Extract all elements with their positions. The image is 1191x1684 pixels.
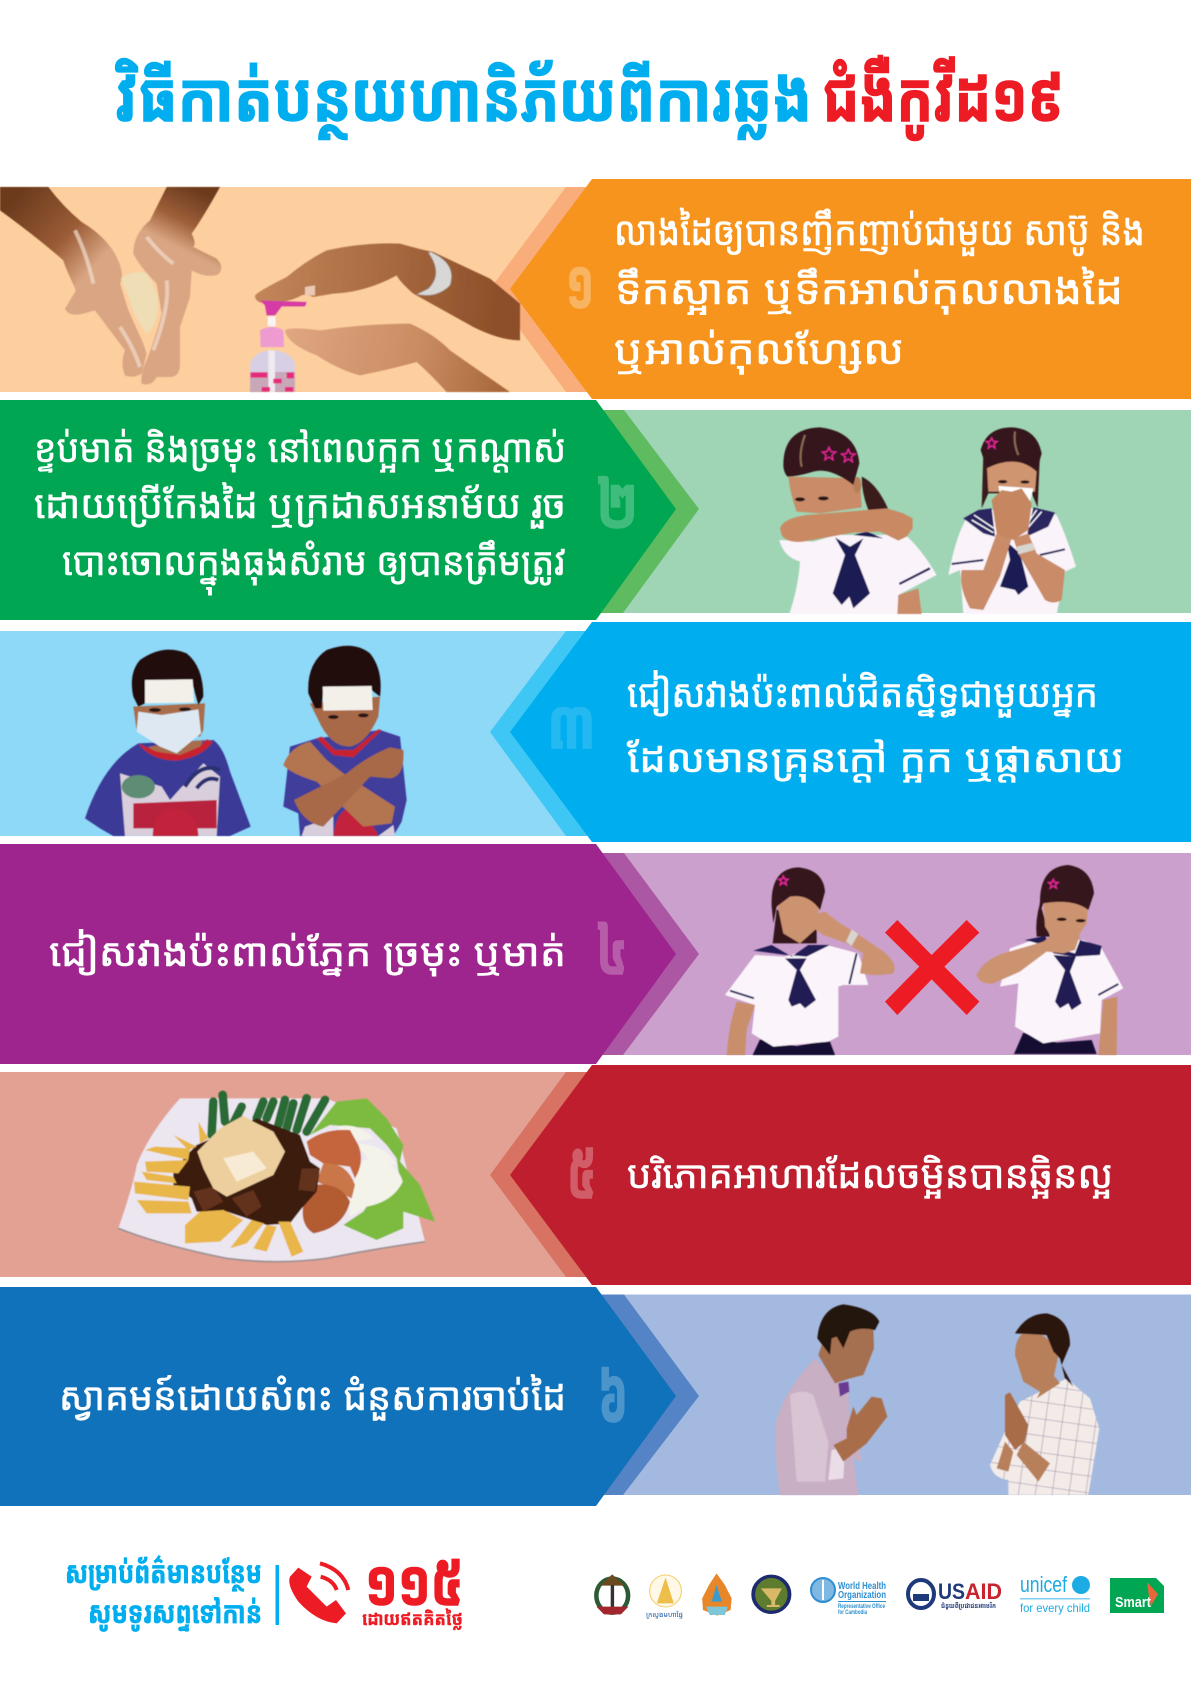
logo: navy round seal: [753, 1576, 789, 1612]
text: step 3: ជៀសវាងប៉ះពាល់ជិតស្និទ្ធជាមួយអ្នក: [627, 670, 1098, 718]
text: step 3: ដែលមានគ្រុនក្តៅ ក្អក ឬផ្តាសាយ: [627, 739, 1124, 783]
logo: WHO: for Cambodia: [838, 1610, 867, 1616]
logo: royal crest: [702, 1573, 732, 1616]
panel: step 1 wash hands: [0, 179, 1191, 399]
icon: phone: [289, 1563, 348, 1623]
text: step 5: បរិភោគអាហារដែលចម្អិនបានឆ្អិនល្អ: [627, 1155, 1113, 1199]
text: step 1: ឬអាល់កុលហ្សែល: [614, 329, 904, 375]
number 5: ៥: [567, 1135, 596, 1213]
free of charge label: ដោយឥតគិតថ្លៃ: [362, 1607, 463, 1630]
panel: step 5 eat well-cooked food: [0, 1065, 1191, 1285]
logo: WHO: [811, 1578, 886, 1616]
logo: WHO: World Health: [838, 1581, 886, 1592]
logo: ministry of health: [596, 1574, 628, 1614]
panel: step 4 avoid touching face: [0, 844, 1191, 1064]
photo: man and woman greeting: [775, 1304, 1099, 1495]
number 1: ១: [566, 246, 594, 323]
text: step 1: [614, 207, 1145, 375]
logo: USAID: [908, 1579, 1002, 1610]
title: វិធីកាត់បន្ថយហានិភ័យពីការឆ្លង: [115, 57, 812, 140]
title: ជំងឺកូវីដ១៩: [822, 55, 1064, 140]
footer: partner logos: [596, 1572, 1164, 1619]
text: step 3: [627, 670, 1124, 783]
hotline number: ១១៥: [365, 1547, 463, 1619]
logo: golden stupa seal: [646, 1575, 683, 1619]
logo: WHO: Organization: [838, 1590, 886, 1601]
text: step 2: ខ្ទប់មាត់ និងច្រមុះ នៅពេលក្អក ឬកណ្តាស់: [34, 429, 566, 473]
logo: UNICEF: unicef: [1020, 1572, 1068, 1597]
logo: USAID: ជំនួយពីប្រជាជនអាមេរិក: [941, 1601, 996, 1610]
text: step 4: ជៀសវាងប៉ះពាល់ភ្នែក ច្រមុះ ឬមាត់: [49, 929, 566, 977]
text: step 1: ទឹកស្អាត ឬទឹកអាល់កុលលាងដៃ: [615, 266, 1123, 315]
text: step 2: ដោយប្រើកែងដៃ ឬក្រដាសអនាម័យ រួច: [34, 483, 566, 528]
number 6: ៦: [598, 1354, 628, 1439]
panel: step 6 greet with sampeah: [0, 1287, 1191, 1506]
number 2: ២: [596, 464, 638, 544]
number 3: ៣: [547, 686, 596, 763]
photo: two sick boys: [85, 646, 407, 836]
logo: WHO: Representative Office: [838, 1604, 885, 1610]
footer: hotline: [65, 1547, 463, 1632]
icon: red cross: [885, 920, 979, 1015]
logo: UNICEF: for every child: [1020, 1601, 1090, 1615]
text: step 2: [34, 429, 566, 595]
logo: Smart: [1110, 1578, 1164, 1613]
logo: USAID: US: [938, 1579, 965, 1604]
logo: golden stupa seal: ក្រសួងមហាផ្ទៃ: [646, 1610, 683, 1619]
hotline prompt text: សម្រាប់ព័ត៌មានបន្ថែម: [65, 1554, 262, 1592]
text: step 1: លាងដៃឲ្យបានញឹកញាប់ជាមួយ សាប៊ូ និង: [614, 207, 1145, 256]
logo: USAID: AID: [965, 1579, 1002, 1604]
logo: Smart: Smart: [1115, 1594, 1151, 1611]
photo: plate of food: [118, 1095, 435, 1262]
number 4: ៤: [596, 910, 628, 990]
photo: girls touching eye and nose: [725, 865, 1123, 1055]
hotline prompt text: សូមទូរសព្ទទៅកាន់: [88, 1597, 262, 1632]
hotline prompt text: [65, 1554, 262, 1632]
logo: UNICEF: [1020, 1572, 1090, 1615]
photo: girls coughing into elbow and tissue: [779, 427, 1076, 614]
panel: step 2 cover mouth and nose: [0, 400, 1191, 620]
text: step 6: ស្វាគមន៍ដោយសំពះ ជំនួសការចាប់ដៃ: [59, 1375, 566, 1421]
photo: hands washing and sanitiser: [0, 187, 520, 392]
panel: step 3 avoid close contact: [0, 622, 1191, 842]
text: step 2: បោះចោលក្នុងធុងសំរាម ឲ្យបានត្រឹមត្រូវ: [62, 540, 566, 595]
